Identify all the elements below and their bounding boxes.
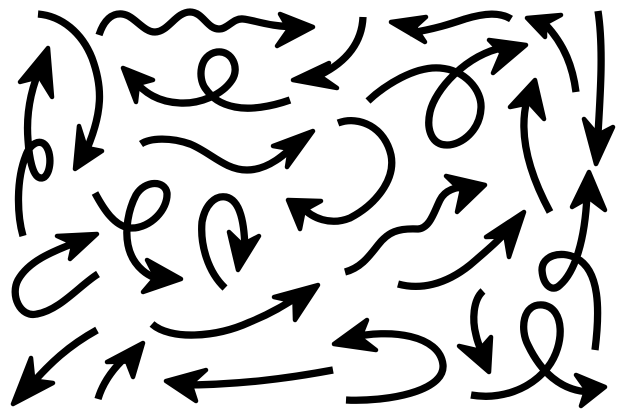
arrow: looped pointing left — [123, 52, 290, 108]
arrow: curved down-left — [293, 17, 363, 88]
arrow: U-turn pointing upper right — [15, 234, 98, 314]
arrow: upward with small loop — [18, 48, 52, 236]
arrow: gentle wave to upper right — [141, 131, 313, 170]
arrow: shallow curve to upper right — [152, 285, 318, 335]
arrow: wavy to the right — [99, 12, 313, 46]
arrow: long curve sweeping down — [38, 14, 102, 169]
arrow: curved upward — [510, 80, 550, 212]
arrow: top pointing left — [391, 14, 511, 42]
arrow: C-shaped hook pointing left — [288, 121, 392, 229]
arrow: hook curving down — [202, 197, 259, 288]
arrow: short to upper right — [98, 343, 143, 399]
arrow: long pointing left — [166, 370, 333, 401]
arrow: looped down to the right — [95, 183, 181, 292]
arrow: large loop to upper right — [368, 40, 526, 145]
arrow: upward with loop at right — [542, 172, 605, 350]
arrow: looped to the right at bottom — [471, 305, 605, 406]
arrow: diagonal to lower left — [13, 330, 97, 404]
arrow: sweeping to upper right — [398, 212, 524, 286]
arrow: curved up-left at top right — [527, 15, 576, 92]
arrow: U-turn pointing left — [334, 320, 443, 400]
arrow: straight down at right edge — [584, 11, 613, 164]
arrow: wavy to upper right — [345, 176, 485, 272]
arrow: short curved down — [459, 291, 491, 372]
